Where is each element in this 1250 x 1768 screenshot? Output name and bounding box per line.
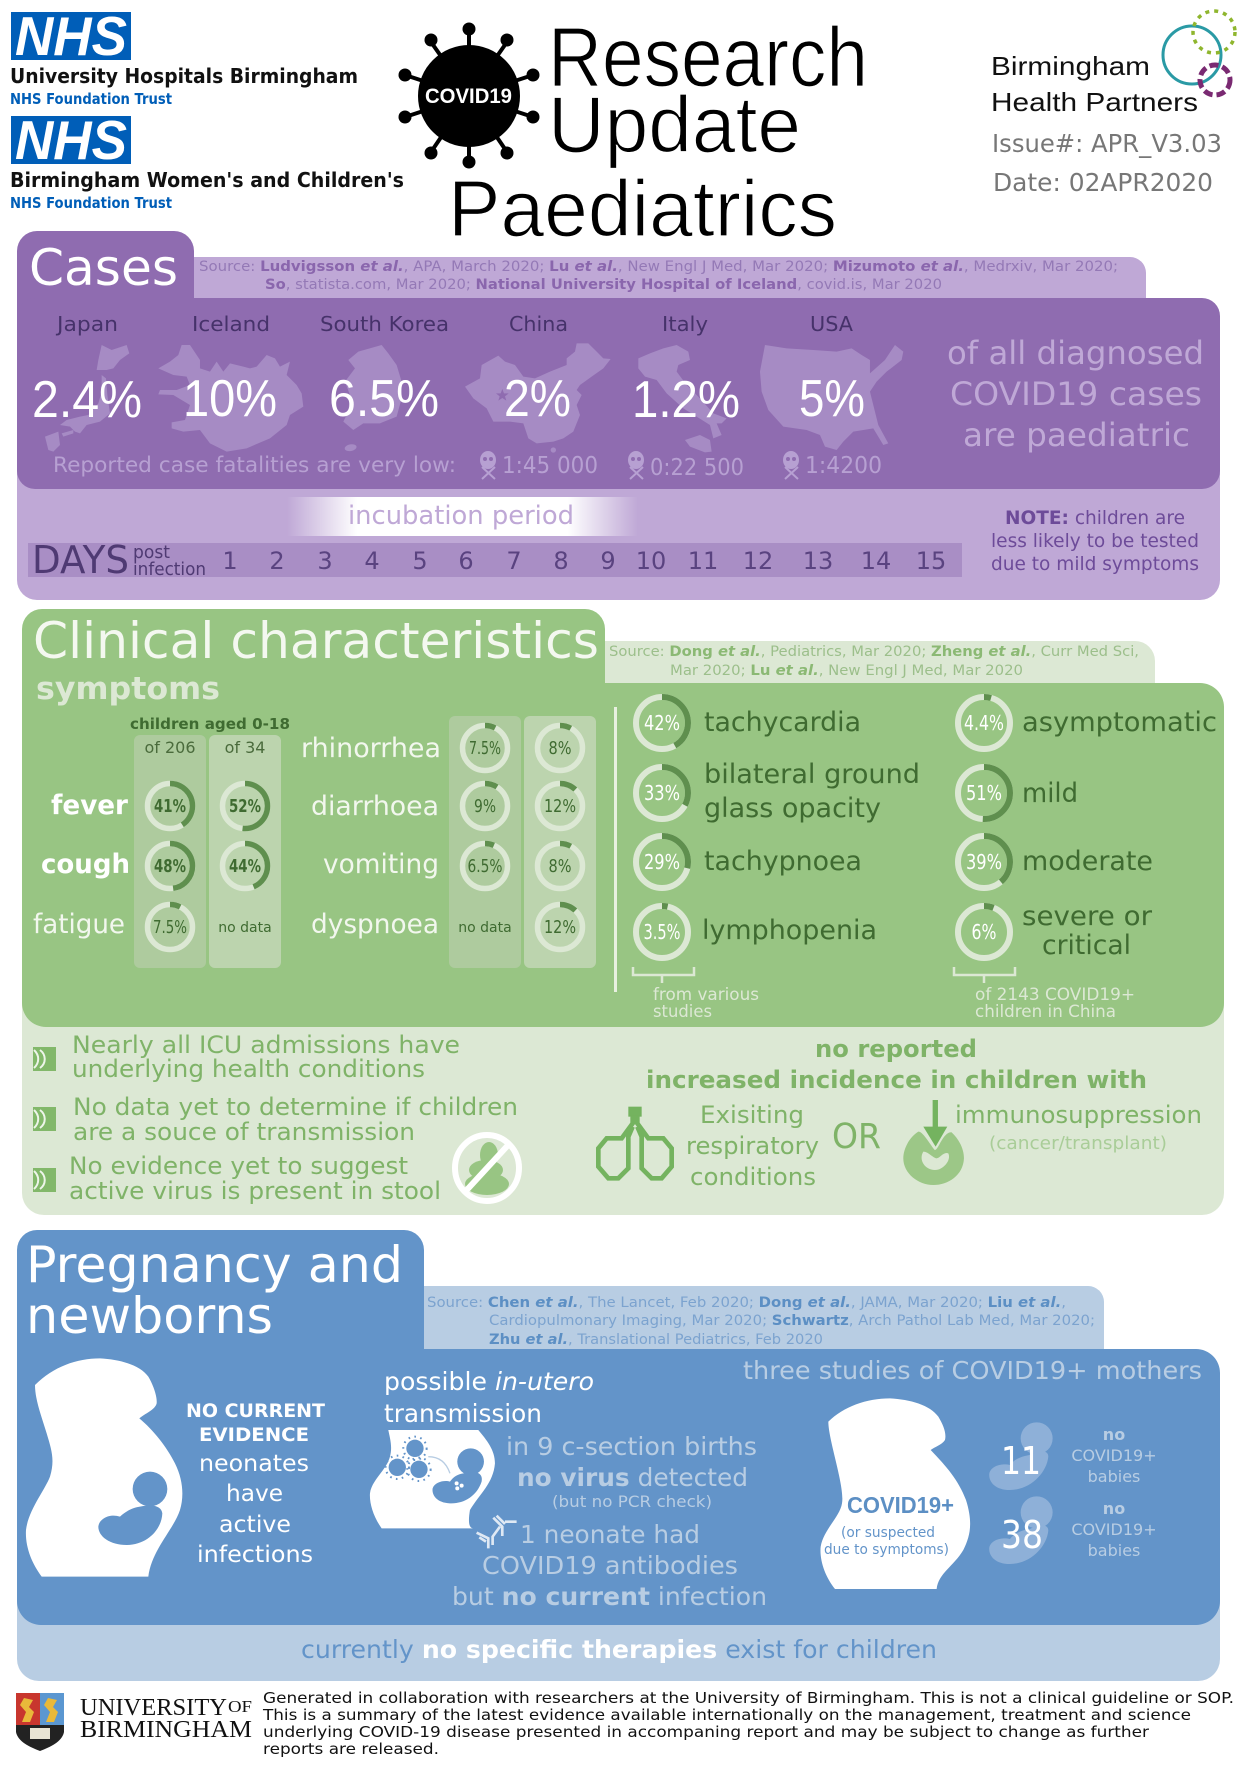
ring values: symptoms: 8% <box>548 738 572 759</box>
heading: pregnancy and newborns <box>26 1236 403 1345</box>
heading: cases: Cases <box>29 239 178 297</box>
bullet text <box>69 1031 518 1205</box>
icon: lungs <box>598 1107 672 1178</box>
text: existing respiratory conditions: Exisiting <box>700 1101 804 1129</box>
timeline: days post infection: 12 <box>743 547 773 575</box>
ring values: symptoms: 12% <box>544 917 576 938</box>
divider line <box>614 707 617 992</box>
callout: of all diagnosed cases <box>947 334 1204 454</box>
timeline: days post infection: 9 <box>600 547 616 575</box>
columns: study backgrounds <box>134 716 596 968</box>
timeline: days post infection <box>28 538 962 582</box>
heading: pregnancy and newborns: Pregnancy and <box>26 1236 403 1294</box>
title: Update <box>548 80 801 169</box>
text: OR: OR <box>832 1117 881 1157</box>
symptom labels: dyspnoea <box>311 909 439 940</box>
source citations: cases: Source: Ludvigsson et al., APA, March 2020; Lu et al., New Engl J Med, Mar 2020; Mizumoto et al., Medrxiv, Mar 2020; <box>199 259 1118 275</box>
ring values: symptoms: 41% <box>154 796 186 817</box>
text: existing respiratory conditions: respiratory <box>686 1132 819 1160</box>
paediatric case percentages: 10% <box>183 370 277 428</box>
ring values: symptoms: no data <box>458 920 512 936</box>
case fatalities: 0:22 500 <box>650 455 744 481</box>
callout: of all diagnosed cases: are paediatric <box>963 416 1190 454</box>
symptom labels: diarrhoea <box>311 791 439 822</box>
text: possible in-utero transmission: transmission <box>384 1399 542 1428</box>
ring values: findings and severity: 39% <box>966 850 1002 874</box>
text: immunosuppression: immunosuppression <box>955 1101 1202 1129</box>
title <box>448 10 868 253</box>
source citations: cases <box>199 259 1118 293</box>
labels: findings and severity: asymptomatic <box>1022 707 1217 738</box>
text: c-section births: no virus detected <box>517 1463 748 1492</box>
icon: skull USA <box>783 451 799 479</box>
stat: 38 babies: COVID19+ <box>1071 1520 1157 1539</box>
paediatric case percentages <box>32 370 865 429</box>
labels: findings and severity: severe or <box>1022 901 1153 932</box>
ring values: symptoms: 8% <box>548 856 572 877</box>
stat: 11 babies: no <box>1103 1425 1125 1444</box>
bullet text: Nearly all ICU admissions have <box>72 1031 460 1059</box>
labels: findings and severity: mild <box>1022 778 1078 809</box>
icon: pregnant silhouette with baby <box>26 1358 182 1577</box>
symptom labels: fatigue <box>33 909 125 940</box>
timeline: days post infection: 4 <box>364 547 380 575</box>
text: no current evidence: EVIDENCE <box>199 1424 309 1446</box>
country labels: Italy <box>662 312 708 336</box>
timeline: days post infection: 5 <box>412 547 428 575</box>
labels: findings and severity: critical <box>1042 930 1131 961</box>
subheading: symptoms: symptoms <box>36 671 220 707</box>
ring values: symptoms: 44% <box>229 856 261 877</box>
logo: NHS University Hospitals Birmingham: NHS Foundation Trust <box>10 90 172 108</box>
text: no current evidence: active <box>219 1512 291 1538</box>
bracket: from various studies: from various <box>653 985 759 1005</box>
paediatric case percentages: 1.2% <box>632 371 740 429</box>
ring charts: symptoms <box>148 726 582 950</box>
stat: 38 babies: babies <box>1088 1541 1140 1560</box>
text: c-section births <box>506 1432 757 1511</box>
ring values: findings and severity: 51% <box>966 781 1002 805</box>
ring values: symptoms: 7.5% <box>469 738 501 759</box>
stat: 38 babies: no <box>1103 1499 1125 1518</box>
bullet text: No evidence yet to suggest <box>69 1152 408 1180</box>
bullet text: are a souce of transmission <box>73 1118 415 1146</box>
timeline: days post infection: 2 <box>269 547 285 575</box>
header <box>10 5 1235 253</box>
symptom labels: rhinorrhea <box>301 733 441 764</box>
paediatric case percentages: 2.4% <box>32 371 142 429</box>
maps: China, Italy, USA <box>465 343 903 453</box>
text: no current evidence: infections <box>197 1542 313 1568</box>
panel: cases <box>17 231 1220 600</box>
ring values: symptoms <box>153 738 576 938</box>
labels: findings and severity: tachypnoea <box>704 846 862 877</box>
panel: pregnancy and newborns <box>17 1230 1220 1681</box>
labels: findings and severity: moderate <box>1022 846 1153 877</box>
column headers: of 34 <box>225 738 265 757</box>
note: testing: less likely to be tested <box>991 530 1199 552</box>
country labels: Iceland <box>192 312 270 336</box>
paediatric case percentages: 5% <box>799 370 865 428</box>
icon: coronavirus with COVID19 label <box>398 22 540 168</box>
symptom labels: vomiting <box>323 849 439 880</box>
ring values: findings and severity: 4.4% <box>964 711 1004 735</box>
logo: NHS University Hospitals Birmingham <box>10 5 358 108</box>
case fatalities: 1:4200 <box>805 453 882 479</box>
ring values: symptoms: no data <box>218 920 272 936</box>
stat: 11 babies: 11 <box>1001 1439 1041 1483</box>
logo: University of Birmingham wordmark <box>80 1695 252 1743</box>
bracket: of 2143 children <box>954 967 1135 1022</box>
ring values: findings and severity: 29% <box>644 850 680 874</box>
timeline: days post infection: 8 <box>553 547 569 575</box>
text: no current evidence <box>186 1400 325 1568</box>
bracket: from various studies <box>633 967 759 1022</box>
panel background: clinical <box>22 609 1224 1215</box>
timeline: days post infection: 15 <box>916 547 946 575</box>
ring values: symptoms: 52% <box>229 796 261 817</box>
timeline: days post infection: 1 <box>222 547 238 575</box>
text: neonate antibodies: but no current infection <box>452 1582 767 1611</box>
text: possible in-utero transmission: possible in-utero <box>384 1367 594 1396</box>
timeline: days post infection: post <box>133 542 170 563</box>
ring values: symptoms: 12% <box>544 796 576 817</box>
incubation period band <box>287 497 638 536</box>
case fatalities <box>53 451 882 481</box>
symptom labels: fever <box>51 790 129 821</box>
text: neonate antibodies <box>452 1520 767 1611</box>
note: testing <box>991 507 1199 575</box>
incubation period band: incubation period <box>348 501 574 531</box>
callout: of all diagnosed cases: of all diagnosed <box>947 334 1204 372</box>
source citations: pregnancy: Source: Chen et al., The Lancet, Feb 2020; Dong et al., JAMA, Mar 2020; Liu et al., <box>427 1295 1066 1311</box>
bracket: of 2143 children: of 2143 COVID19+ <box>975 985 1135 1005</box>
text: neonate antibodies: 1 neonate had <box>520 1520 700 1549</box>
icon: immunosuppression <box>903 1100 964 1185</box>
paediatric case percentages: 2% <box>504 370 571 428</box>
timeline: days post infection: 13 <box>803 547 833 575</box>
country labels <box>55 312 853 336</box>
source citations: pregnancy <box>427 1295 1095 1348</box>
issue and date: Date: 02APR2020 <box>993 168 1213 197</box>
ring values: findings and severity: 6% <box>972 920 996 944</box>
heading: pregnancy and newborns: newborns <box>26 1287 273 1345</box>
text: immunosuppression: (cancer/transplant) <box>989 1133 1167 1154</box>
note: testing: NOTE: children are <box>1005 507 1185 529</box>
ring values: symptoms: 9% <box>474 796 496 817</box>
bullet text: active virus is present in stool <box>69 1177 441 1205</box>
source citations: clinical: Source: Dong et al., Pediatrics, Mar 2020; Zheng et al., Curr Med Sci, <box>609 644 1139 660</box>
bullet icons <box>33 1047 56 1192</box>
labels: findings and severity <box>702 707 1217 961</box>
heading: no reported incidence: increased incidence in children with <box>646 1066 1147 1094</box>
stat: 11 babies <box>989 1422 1157 1490</box>
timeline: days post infection: 14 <box>861 547 891 575</box>
ring values: findings and severity: 42% <box>644 711 680 735</box>
banner: no specific therapies: currently no specific therapies exist for children <box>301 1635 937 1664</box>
logo: NHS Birmingham Women's and Children's: NHS <box>15 109 127 171</box>
heading: no reported incidence: no reported <box>815 1035 977 1063</box>
logo: NHS Birmingham Women's and Children's <box>10 109 404 212</box>
symptom labels: cough <box>41 849 130 880</box>
logo: Birmingham Health Partners <box>991 11 1235 117</box>
ring values: findings and severity: 33% <box>644 781 680 805</box>
icon: pregnant silhouette COVID19+ <box>820 1398 970 1589</box>
logo: NHS University Hospitals Birmingham: University Hospitals Birmingham <box>10 64 358 88</box>
text: existing respiratory conditions <box>686 1101 819 1191</box>
disclaimer text: reports are released. <box>263 1740 439 1758</box>
text: no current evidence: neonates <box>199 1451 309 1477</box>
case fatalities: 1:45 000 <box>502 453 598 479</box>
logo: Birmingham Health Partners: Birmingham <box>991 51 1150 81</box>
disclaimer text: This is a summary of the latest evidence available internationally on the management, treatment and science <box>262 1706 1191 1724</box>
text: no current evidence: NO CURRENT <box>186 1400 325 1422</box>
country labels: China <box>509 312 568 336</box>
country labels: USA <box>810 312 853 336</box>
paediatric case percentages: 6.5% <box>329 370 439 428</box>
text: neonate antibodies: COVID19 antibodies <box>482 1551 738 1580</box>
icon: skull China <box>480 451 496 479</box>
timeline: days post infection: 10 <box>636 547 666 575</box>
callout: of all diagnosed cases: COVID19 cases <box>950 375 1202 413</box>
case fatalities: Reported case fatalities are very low: <box>53 453 456 477</box>
ring values: symptoms: 7.5% <box>153 917 187 938</box>
title: Research <box>548 10 868 104</box>
ring values: symptoms: 6.5% <box>468 856 502 877</box>
stat: 11 babies: babies <box>1088 1467 1140 1486</box>
column headers <box>144 738 265 757</box>
footer <box>16 1689 1234 1758</box>
icon: coronavirus with COVID19 label: COVID19 <box>425 85 512 108</box>
heading: clinical characteristics: Clinical characteristics <box>33 612 599 670</box>
ring values: findings and severity: 3.5% <box>644 920 680 944</box>
labels: findings and severity: tachycardia <box>704 707 861 738</box>
logo: NHS Birmingham Women's and Children's: NHS Foundation Trust <box>10 194 172 212</box>
title: Paediatrics <box>448 164 837 253</box>
source citations: clinical <box>609 644 1139 679</box>
logo: University of Birmingham wordmark: UNIVERSITY <box>80 1695 227 1721</box>
bracket: of 2143 children: children in China <box>975 1002 1116 1022</box>
text: existing respiratory conditions: conditions <box>690 1163 816 1191</box>
text: c-section births: (but no PCR check) <box>552 1492 712 1511</box>
panel background: cases <box>17 231 1220 600</box>
country labels: South Korea <box>320 312 449 336</box>
issue and date: Issue#: APR_V3.03 <box>992 129 1222 158</box>
text: no current evidence: have <box>226 1481 283 1507</box>
labels: findings and severity: glass opacity <box>704 793 881 824</box>
text: three studies: three studies of COVID19+ mothers <box>743 1356 1202 1385</box>
country labels: Japan <box>55 312 118 336</box>
icon: pregnant silhouette COVID19+: COVID19+ <box>847 1492 954 1518</box>
issue and date <box>992 129 1222 197</box>
logo: NHS University Hospitals Birmingham: NHS <box>15 5 127 67</box>
label: children aged: children aged 0-18 <box>130 715 290 733</box>
ring values: symptoms: 48% <box>154 856 186 877</box>
stat: 11 babies: COVID19+ <box>1071 1446 1157 1465</box>
panel: clinical characteristics <box>22 609 1224 1215</box>
logo: NHS Birmingham Women's and Children's: Birmingham Women's and Children's <box>10 168 404 192</box>
maps: Japan, Iceland, South Korea <box>45 345 402 452</box>
labels: findings and severity: lymphopenia <box>702 915 877 946</box>
column headers: of 206 <box>144 738 196 757</box>
bracket: from various studies: studies <box>653 1002 712 1022</box>
timeline: days post infection: 3 <box>317 547 333 575</box>
stat: 38 babies: 38 <box>1001 1513 1043 1557</box>
logo: University of Birmingham wordmark: BIRMINGHAM <box>80 1717 252 1743</box>
logo: University of Birmingham wordmark: OF <box>228 1697 252 1716</box>
source citations: pregnancy: Zhu et al., Translational Pediatrics, Feb 2020 <box>489 1332 823 1348</box>
symptom labels <box>33 733 441 940</box>
logo: University of Birmingham crest <box>16 1693 64 1751</box>
bullet text: No data yet to determine if children <box>73 1093 518 1121</box>
ring values: findings and severity <box>644 711 1004 944</box>
source citations: cases: So, statista.com, Mar 2020; National University Hospital of Iceland , covid.is, Mar 2020 <box>265 277 942 293</box>
disclaimer text <box>262 1689 1234 1758</box>
icon: antibody <box>477 1516 517 1548</box>
icon: no stool <box>455 1135 519 1201</box>
logo: Birmingham Health Partners: Health Partners <box>991 87 1198 117</box>
stat: 38 babies <box>989 1496 1157 1564</box>
text: possible in-utero transmission <box>384 1367 594 1428</box>
icon: pregnant silhouette COVID19+: due to symptoms) <box>824 1542 949 1558</box>
note: testing: due to mild symptoms <box>991 553 1199 575</box>
labels: findings and severity: bilateral ground <box>704 759 920 790</box>
source citations: pregnancy: Cardiopulmonary Imaging, Mar 2020; Schwartz , Arch Pathol Lab Med, Mar 2020; <box>489 1313 1095 1329</box>
source citations: clinical: Mar 2020; Lu et al., New Engl J Med, Mar 2020 <box>670 663 1023 679</box>
disclaimer text: underlying COVID-19 disease presented in accompaning report and may be subject to change as further <box>263 1723 1150 1741</box>
disclaimer text: Generated in collaboration with researchers at the University of Birmingham. This is not a clinical guideline or SOP. <box>263 1689 1234 1707</box>
timeline: days post infection: infection <box>133 559 206 580</box>
panel background: pregnancy <box>17 1230 1220 1681</box>
text: immunosuppression <box>955 1101 1202 1154</box>
icon: pregnant silhouette COVID19+: (or suspected <box>841 1525 935 1541</box>
icon: womb with virus and baby <box>370 1430 495 1528</box>
timeline: days post infection: 6 <box>458 547 474 575</box>
text: c-section births: in 9 c-section births <box>506 1432 757 1461</box>
timeline: days post infection: 7 <box>506 547 522 575</box>
timeline: days post infection: DAYS <box>32 538 129 582</box>
timeline: days post infection: 11 <box>688 547 718 575</box>
icon: skull Italy <box>628 451 644 479</box>
heading: no reported incidence <box>646 1035 1147 1094</box>
ring charts: findings and severity <box>636 697 1010 958</box>
bullet text: underlying health conditions <box>72 1055 425 1083</box>
